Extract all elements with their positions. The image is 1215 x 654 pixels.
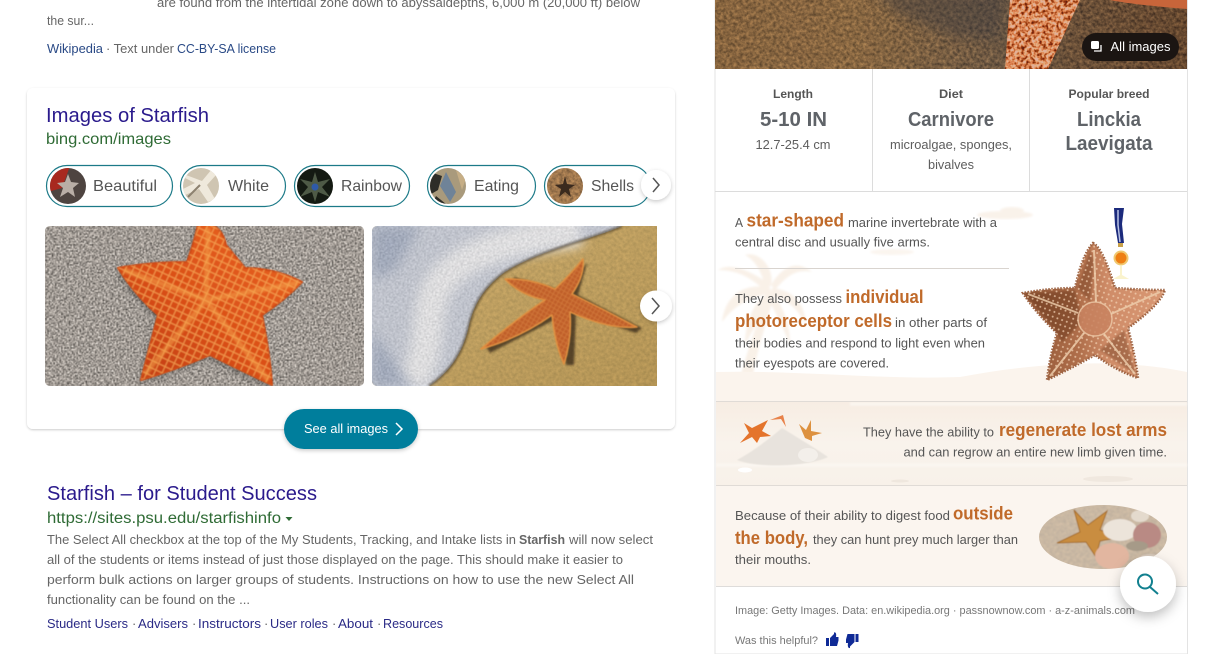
hero photo: [715, 0, 1187, 69]
category chips: Beautiful: [93, 178, 157, 195]
stat: diet: [890, 87, 1012, 172]
medal ribbon and orb: [1113, 208, 1129, 279]
section: outside the body: they can hunt prey much larger than: [813, 532, 1018, 547]
text: star-shaped: A: [735, 215, 743, 230]
stat: popular breed: Popular breed: [1068, 87, 1150, 101]
stat: diet: bivalves: [928, 158, 974, 172]
photo: starfish at the water's edge: [372, 226, 657, 386]
all images pill: All images: [1110, 39, 1171, 54]
section: outside the body: [716, 486, 1187, 586]
see all images button: See all images: [304, 421, 388, 436]
search result: Starfish for Student Success: About: [338, 616, 373, 631]
divider: [735, 268, 1009, 270]
section: regenerate lost arms: [716, 402, 1187, 486]
chip scroll arrow: [641, 170, 671, 200]
search result: Starfish for Student Success: ·: [332, 616, 336, 631]
attribution: Image: Getty Images. Data: en.wikipedia.org · passnownow.com · a-z-animals.com: [735, 605, 1135, 617]
stat: length: Length: [773, 87, 813, 101]
stat: length: [756, 87, 830, 152]
section: outside the body: the body,: [735, 528, 808, 548]
panel: images of starfish card: [27, 88, 675, 449]
text: star-shaped: central disc and usually five arms.: [735, 234, 930, 250]
icon: thumbs down: [846, 634, 858, 648]
category chips: Eating: [474, 178, 519, 195]
illustration: starfish with medal: [1023, 208, 1165, 380]
photo carousel arrow: [640, 290, 672, 322]
search result: Starfish for Student Success: Starfish – for Student Success: [47, 483, 317, 505]
text: star-shaped: [735, 210, 998, 250]
search result: Starfish for Student Success: Instructors: [198, 616, 262, 631]
stat: popular breed: [1066, 87, 1153, 155]
section: regenerate lost arms: regenerate lost arms: [999, 420, 1167, 440]
card heading: Images of Starfish: [46, 105, 209, 127]
all images pill: [1082, 33, 1179, 61]
card source url: bing.com/images: [46, 131, 171, 148]
search result: Starfish for Student Success: [47, 483, 653, 631]
Wikipedia result snippet: [47, 0, 641, 56]
Wikipedia result snippet: the sur...: [47, 13, 94, 28]
category chips: White: [228, 178, 269, 195]
stat: diet: Diet: [939, 87, 963, 101]
text: photoreceptor cells: [735, 287, 987, 370]
search result: Starfish for Student Success: Advisers: [138, 616, 188, 631]
section: regenerate lost arms: and can regrow an entire new limb given time.: [904, 444, 1167, 460]
photo: starfish and shells oval: [1039, 505, 1167, 569]
stat: popular breed: Linckia: [1077, 109, 1142, 131]
Wikipedia result snippet: CC-BY-SA license: [177, 41, 276, 56]
text: photoreceptor cells: their bodies and respond to light even when: [735, 336, 985, 350]
panel: starfish infographic: [715, 0, 1188, 654]
illustration: sand pile with starfish: [737, 415, 828, 472]
stat: diet: Carnivore: [908, 109, 994, 131]
text: photoreceptor cells: individual: [846, 287, 924, 307]
search result: Starfish for Student Success: will now select: [568, 532, 653, 547]
search result: Starfish for Student Success: ·: [377, 616, 381, 631]
text: photoreceptor cells: in other parts of: [895, 315, 987, 330]
photo: orange starfish on sand: [45, 224, 364, 388]
search result: Starfish for Student Success: Resources: [383, 616, 443, 631]
category chips: [46, 166, 650, 206]
search result: Starfish for Student Success: all of the students or items instead of just those displayed on the page. This should make it easier to: [47, 552, 623, 567]
stat: diet: microalgae, sponges,: [890, 138, 1012, 152]
stat: length: 12.7-25.4 cm: [756, 138, 830, 152]
Wikipedia result snippet: Wikipedia: [47, 41, 104, 56]
search result: Starfish for Student Success: perform bulk actions on larger groups of students. Instructions on how to use the new Select All: [47, 572, 634, 587]
stat: popular breed: Laevigata: [1066, 133, 1153, 155]
search result: Starfish for Student Success: User roles: [270, 616, 328, 631]
stat: length: 5-10 IN: [760, 109, 827, 131]
icon: thumbs up: [826, 632, 838, 646]
beach background illustration: [716, 207, 1187, 402]
search result: Starfish for Student Success: https://sites.psu.edu/starfishinfo: [47, 510, 281, 527]
icon: magnifier: [1138, 574, 1158, 594]
category chips: Rainbow: [341, 178, 402, 195]
text: star-shaped: star-shaped: [746, 210, 844, 230]
floating search button: [1120, 556, 1176, 612]
text: photoreceptor cells: They also possess: [735, 291, 842, 306]
text: star-shaped: marine invertebrate with a: [848, 215, 998, 230]
section: outside the body: their mouths.: [735, 552, 811, 567]
helpful prompt: Was this helpful?: [735, 635, 818, 647]
search result: Starfish for Student Success: Student Users: [47, 616, 128, 631]
search result: Starfish for Student Success: Starfish: [519, 532, 565, 547]
section: outside the body: outside: [953, 504, 1013, 524]
see all images button: [284, 409, 418, 449]
search result: Starfish for Student Success: The Select All checkbox at the top of the My Students, Tracking, and Intake lists in: [47, 532, 516, 547]
section: outside the body: Because of their ability to digest food: [735, 508, 950, 523]
text: photoreceptor cells: photoreceptor cells: [735, 311, 892, 331]
search result: Starfish for Student Success: ·: [192, 616, 196, 631]
search result: Starfish for Student Success: ·: [132, 616, 136, 631]
section: regenerate lost arms: They have the ability to: [863, 424, 994, 440]
search result: Starfish for Student Success: functionality can be found on the ...: [47, 592, 250, 607]
category chips: Shells: [591, 178, 634, 195]
text: photoreceptor cells: their eyespots are covered.: [735, 356, 889, 370]
search result: Starfish for Student Success: ·: [264, 616, 268, 631]
Wikipedia result snippet: · Text under: [106, 41, 175, 56]
